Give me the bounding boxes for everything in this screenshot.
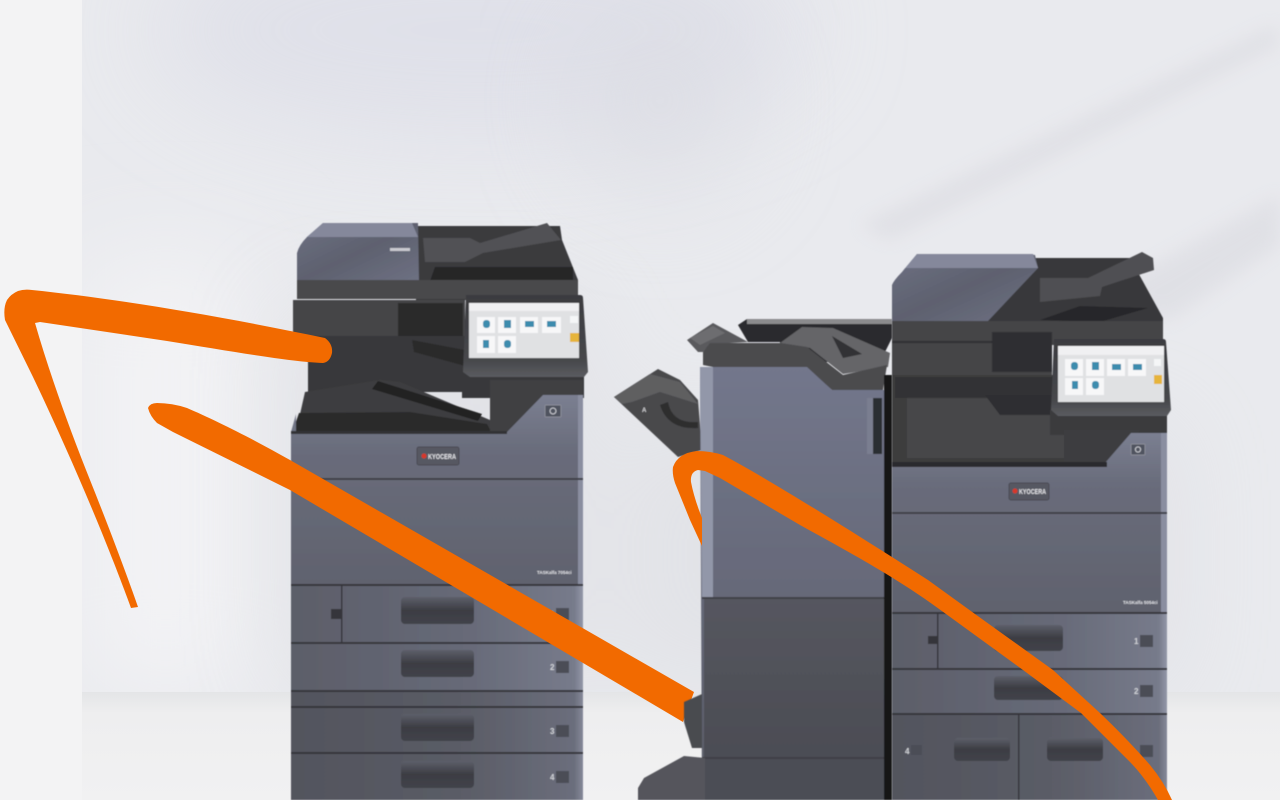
drawer handles: [401, 597, 474, 624]
touch screen panel: [463, 295, 588, 377]
printer: right machine: [892, 252, 1171, 800]
lower housing: [892, 433, 1167, 800]
drawer handles: [994, 625, 1063, 651]
document feeder: [416, 223, 578, 300]
bottom side tray: [638, 756, 705, 800]
tray labels: 2: [550, 663, 555, 672]
model label: TASKalfa 7054ci: [537, 570, 572, 575]
model label: TASKalfa 5054ci: [1123, 600, 1158, 605]
orange brush stroke: middle diagonal: [148, 403, 694, 722]
tray labels: 4: [550, 773, 555, 782]
left margin band: [0, 0, 82, 800]
tray labels: 4: [905, 747, 910, 756]
orange brush stroke: left chevron: [4, 290, 332, 608]
logo: KYOCERA: [1009, 483, 1049, 500]
staple tray upper: [687, 323, 748, 352]
vertical black gap: [884, 375, 892, 800]
finisher body: [700, 367, 885, 800]
top dark hood: [738, 319, 892, 374]
tray labels: [905, 635, 1153, 757]
feeder: [985, 252, 1163, 345]
tray labels: [550, 608, 569, 783]
dark band: [892, 321, 1163, 345]
dark body: [892, 332, 1167, 470]
staple tray lower: A: [642, 408, 647, 414]
tray labels: 3: [550, 727, 555, 736]
logo: KYOCERA: KYOCERA: [1019, 489, 1046, 496]
side handle: [867, 398, 882, 454]
printer: left machine: [291, 223, 588, 800]
finisher side grip: [684, 694, 702, 748]
orange brush stroke: right diagonal: [673, 451, 1172, 800]
tray labels: 1: [1134, 637, 1139, 646]
tray labels: 1: [550, 610, 555, 619]
upper dark band: [297, 280, 578, 299]
logo: KYOCERA: [417, 447, 459, 465]
touch screen panel: [1051, 339, 1171, 416]
finisher front band: [703, 343, 887, 390]
logo: KYOCERA: KYOCERA: [428, 454, 456, 461]
dark inner body: [292, 300, 584, 436]
scanner cover: [892, 254, 1038, 321]
main body lower housing: [291, 395, 583, 800]
staple tray lower: [614, 369, 702, 457]
tray labels: 2: [1134, 687, 1139, 696]
scanner top cover: [297, 223, 419, 282]
printer: finisher unit: [614, 319, 892, 800]
